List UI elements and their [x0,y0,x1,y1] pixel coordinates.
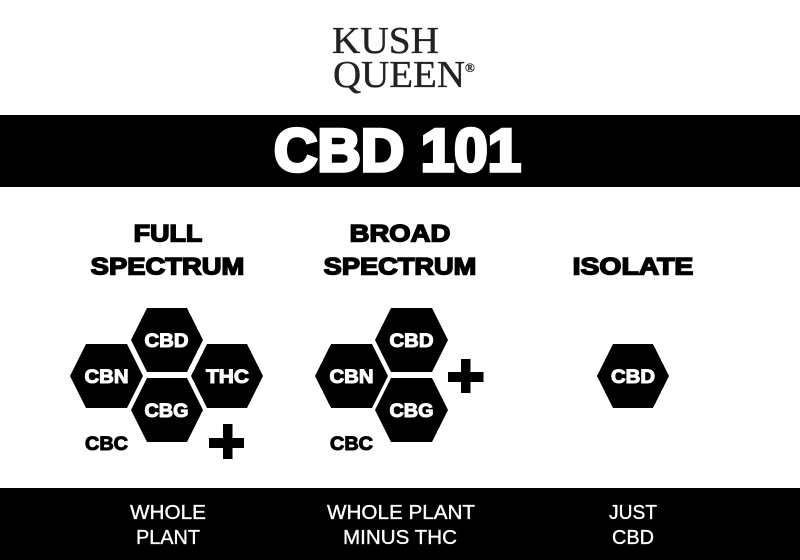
logo: Kush Queen: ® [465,60,475,75]
title banner [0,115,800,187]
label: CBC: CBC [85,434,128,455]
hexagon: THC [191,344,263,408]
hexagon: CBG: CBG [390,401,434,422]
hexagon: THC: THC [206,367,249,388]
heading: broad spectrum: SPECTRUM [324,253,476,280]
heading: full spectrum: FULL [134,220,202,247]
caption: whole plant minus THC [327,501,475,549]
diagram: broad spectrum compounds [315,308,484,455]
hexagon: CBN [315,344,388,408]
hexagon: isolate CBD: CBD [611,367,655,388]
heading: full spectrum: SPECTRUM [91,253,244,280]
caption: whole plant [130,501,206,549]
footer band [0,488,800,560]
caption: just CBD: JUST [609,501,657,524]
caption: whole plant: PLANT [136,526,200,549]
hexagon: CBD: CBD [390,331,434,352]
hexagon: isolate CBD [597,344,669,408]
heading: broad spectrum [324,220,476,280]
title: CBD 101 [274,117,521,184]
hexagon: CBG [375,378,448,442]
caption: just CBD: CBD [612,526,654,549]
hexagon: CBG [131,378,203,442]
hexagon: CBD [375,308,448,372]
label: CBC: CBC [330,434,373,455]
hexagon: CBD [131,308,203,372]
hexagon: CBG: CBG [144,401,188,422]
hexagon: CBN [70,344,143,408]
icon: plus [448,359,484,393]
logo: Kush Queen [332,20,475,96]
heading: broad spectrum: BROAD [350,220,450,247]
heading: full spectrum [91,220,244,280]
logo: Kush Queen: QUEEN [333,54,465,96]
hexagon: CBN: CBN [84,367,128,388]
hexagon: CBN: CBN [330,367,374,388]
icon: plus [209,424,244,459]
logo: Kush Queen: KUSH [332,20,439,62]
caption: whole plant: WHOLE [130,501,206,524]
caption: whole plant minus THC: MINUS THC [343,526,457,549]
caption: whole plant minus THC: WHOLE PLANT [327,501,475,524]
diagram: full spectrum compounds [70,308,263,459]
hexagon: CBD: CBD [144,331,188,352]
heading: isolate: ISOLATE [573,253,693,280]
caption: just CBD [609,501,657,549]
